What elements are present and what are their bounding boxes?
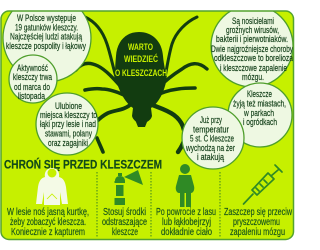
caption: jacket: Koniecznie z kapturem <box>11 227 85 238</box>
bubble: activity: listopada <box>18 91 46 101</box>
bubble: favourite places: łąki przy lesie i nad <box>40 119 96 129</box>
tick heading: WARTO <box>128 42 153 52</box>
bubble: temperature: wychodzą na żer <box>185 143 235 153</box>
icon: syringe <box>244 165 282 204</box>
bubble: temperature: temperatur <box>193 124 229 134</box>
bubble: activity <box>9 55 57 103</box>
bubble: temperature: Już przy <box>200 115 222 125</box>
tick heading <box>115 42 167 78</box>
caption: repellent: kleszcze <box>112 227 138 238</box>
bubble: carriers: mózgu. <box>242 72 264 82</box>
tick legs <box>76 17 207 152</box>
caption: jacket: żeby zobaczyć kleszcza. <box>10 217 86 228</box>
bubble: favourite places: Ulubione <box>55 101 82 111</box>
bubble: species: 19 gatunków kleszczy. <box>15 22 78 32</box>
icon: person <box>176 164 194 207</box>
bubble: favourite places: stawami, polany <box>45 128 92 138</box>
tick body <box>115 32 166 127</box>
illustration: tick <box>76 17 207 152</box>
tick heading: O KLESZCZACH <box>115 68 167 78</box>
bubble: cities: i ogródkach <box>243 117 277 127</box>
bubble: temperature <box>182 107 244 169</box>
bubble: carriers: Są nosicielami <box>232 16 274 26</box>
bubble: species: Najczęściej ludzi atakują <box>10 32 83 42</box>
bubble: carriers: groźnych wirusów, <box>226 25 279 35</box>
caption: jacket: W lesie noś jasną kurtkę, <box>7 207 89 218</box>
icon: hoodie <box>36 168 68 205</box>
bubble: species: kleszcze pospolity i łąkowy <box>6 41 86 51</box>
bubble: carriers <box>211 5 294 87</box>
bubble: favourite places: miejsca kleszczy to <box>40 110 97 120</box>
caption: repellent <box>102 207 147 238</box>
bubble: cities: w parkach <box>243 108 274 118</box>
caption: check body: lub łąkłobejrzyj <box>162 217 211 228</box>
caption: repellent: Stosuj środki <box>103 207 146 218</box>
bubble: activity: od marca do <box>14 82 50 92</box>
bubble: temperature: 5 st. C kleszcze <box>190 134 234 144</box>
bubble: activity: Aktywność <box>17 63 48 73</box>
bubble: favourite places: oraz zagajniki <box>48 138 88 148</box>
bubble: activity: kleszczy trwa <box>13 72 53 82</box>
caption: check body <box>156 207 216 238</box>
bubble: species <box>2 12 92 82</box>
caption: vaccination <box>224 207 293 238</box>
heading: protect yourself: CHROŃ SIĘ PRZED KLESZCZEM <box>4 156 162 172</box>
bubble: temperature: i atakują <box>197 152 225 162</box>
icon: spray can <box>114 170 143 205</box>
caption: jacket <box>7 207 89 238</box>
caption: repellent: odstraszające <box>102 217 147 228</box>
caption: check body: Po powrocie z lasu <box>156 207 216 218</box>
bubble: species: W Polsce występuje <box>17 13 76 23</box>
caption: check body: dokładnie ciało <box>161 227 212 238</box>
tick heading: WIEDZIEĆ <box>124 53 158 64</box>
bubble: cities: Kleszcze <box>247 89 272 99</box>
bubble: favourite places <box>36 93 98 155</box>
bubble: cities <box>228 83 292 147</box>
caption: vaccination: pryszczowemu <box>233 217 280 228</box>
